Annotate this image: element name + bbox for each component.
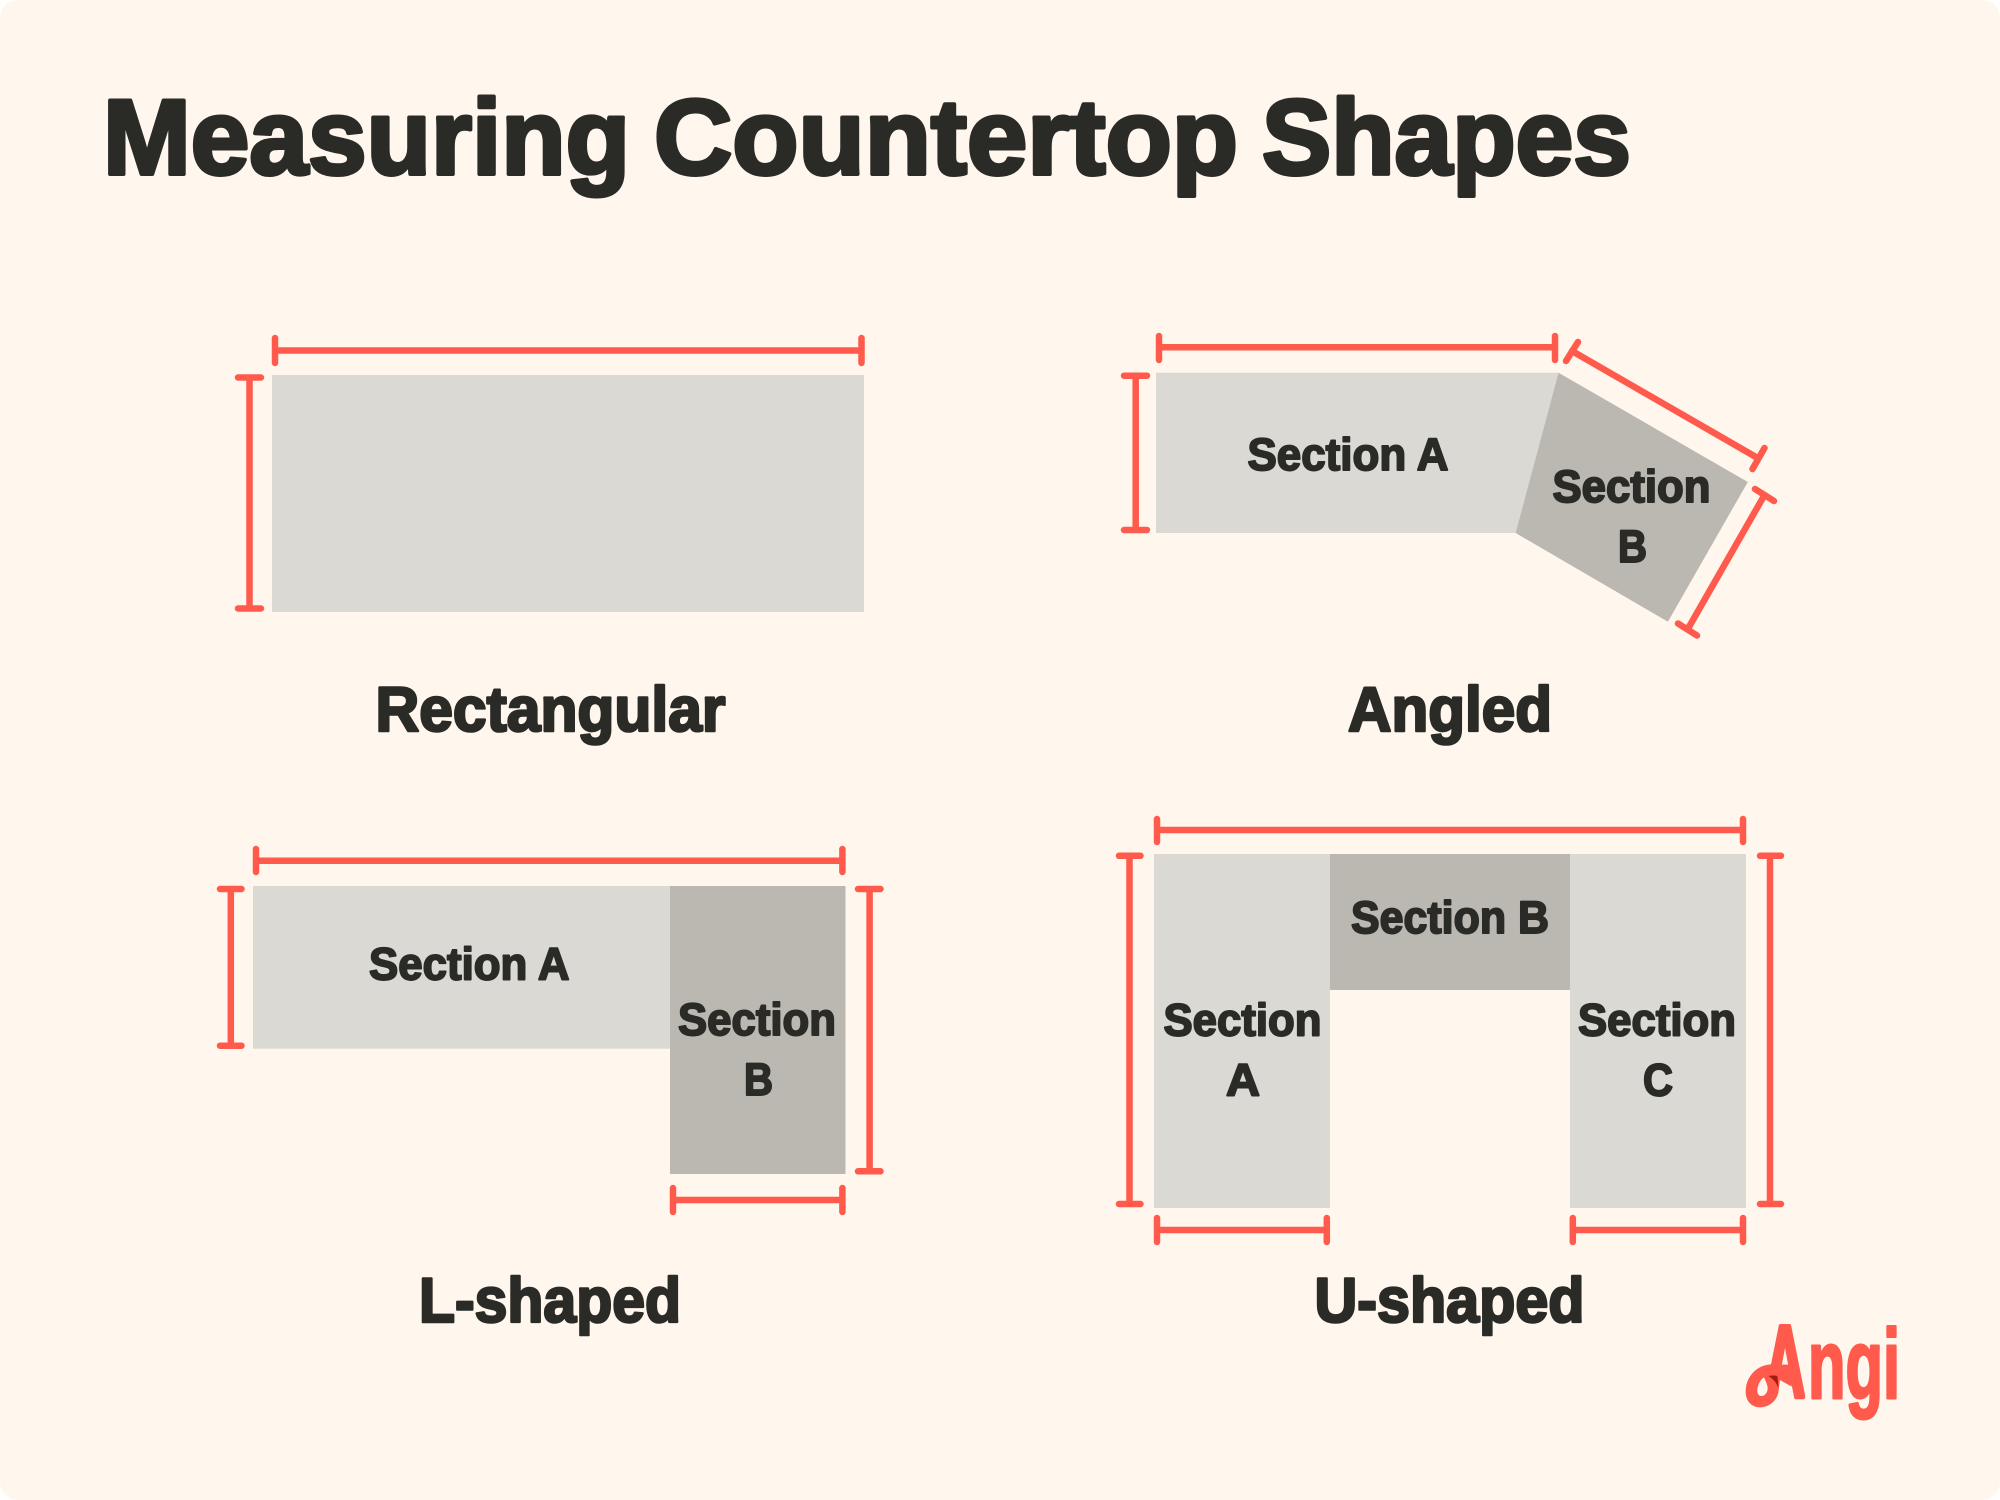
shape: U section C: [1570, 854, 1746, 1208]
panel: L-shaped: [220, 849, 880, 1336]
shape: L section B: [670, 886, 846, 1174]
dimension: rectangular width: [275, 338, 862, 363]
title: Measuring: [103, 77, 630, 197]
dimension: U bottom A width: [1157, 1218, 1327, 1242]
label: L-shaped: L-shaped: [419, 1266, 681, 1336]
dimension: angled left depth: [1124, 376, 1147, 530]
dimension: rectangular depth: [238, 378, 261, 608]
title: [103, 77, 1631, 197]
text: Section A: Section: [1164, 994, 1322, 1046]
icon: logo swash loop: [1746, 1364, 1792, 1407]
shape: L section A: [253, 886, 670, 1049]
panel: rectangular: [238, 338, 864, 745]
logo: Angi: A: [1765, 1306, 1805, 1418]
text: Section B: Section: [678, 994, 836, 1045]
shape: rectangular counter: [272, 375, 864, 612]
shape: angled section B: [1516, 373, 1748, 622]
dimension: U bottom C width: [1573, 1218, 1743, 1242]
panel: angled: [1124, 336, 1774, 745]
shape: U section A: [1154, 854, 1330, 1208]
title: Countertop: [654, 77, 1238, 197]
text: Section A: [1164, 994, 1322, 1106]
dimension: L bottom width: [673, 1188, 842, 1212]
shape: angled section A: [1156, 373, 1558, 533]
dimension: angled diagonal length: [1566, 342, 1764, 469]
text: Section B: [678, 994, 836, 1105]
logo: Angi: [1746, 1324, 1897, 1420]
label: Angled: Angled: [1348, 675, 1552, 745]
panel: U-shaped: [1119, 819, 1781, 1336]
logo: Angi: ngi: [1808, 1309, 1900, 1419]
title: Shapes: [1262, 77, 1631, 197]
text: Section B: B: [1618, 521, 1647, 572]
dimension: U right length: [1760, 856, 1781, 1204]
dimension: angled diagonal depth: [1678, 489, 1774, 636]
text: Section C: Section: [1578, 994, 1736, 1046]
dimension: U left length: [1119, 856, 1140, 1204]
dimension: U top width: [1157, 819, 1743, 842]
label: Rectangular: Rectangular: [376, 675, 726, 745]
shape: U section B: [1330, 854, 1570, 990]
dimension: L top width: [256, 849, 842, 872]
text: Section B: Section: [1552, 461, 1710, 512]
text: Section B: [1552, 461, 1710, 572]
text: Section B: Section B: [1351, 892, 1549, 943]
text: Section B: B: [744, 1054, 773, 1105]
text: Section A: A: [1226, 1054, 1260, 1106]
text: Section C: [1578, 994, 1736, 1106]
dimension: L left depth: [220, 889, 242, 1046]
dimension: angled top width: [1159, 336, 1555, 360]
label: U-shaped: U-shaped: [1314, 1266, 1584, 1336]
text: Section C: C: [1643, 1054, 1673, 1106]
text: Section A: Section A: [1248, 429, 1448, 480]
dimension: L right length: [858, 889, 880, 1171]
text: Section A: Section A: [369, 938, 570, 990]
